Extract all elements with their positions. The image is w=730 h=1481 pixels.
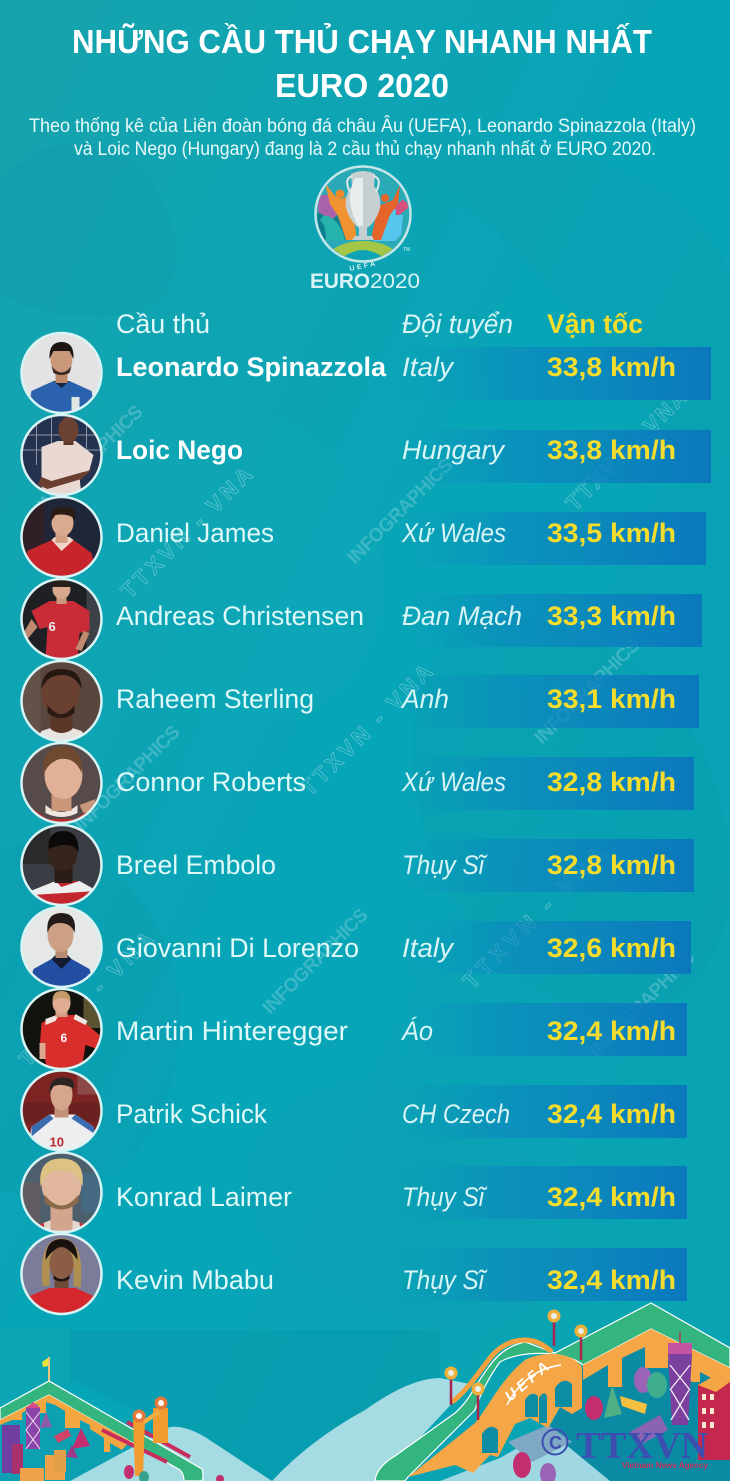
watermarks: TTXVN - VNA (296, 659, 437, 801)
portrait: Konrad Laimer (20, 1152, 102, 1234)
row: Loic Nego: 33,8 km/h (547, 435, 676, 465)
orange rim (452, 1340, 552, 1402)
portrait: Raheem Sterling (20, 660, 102, 742)
UEFA arch: UEFA (502, 1359, 552, 1405)
portrait: Leonardo Spinazzola (20, 332, 102, 414)
portrait: Breel Embolo (20, 824, 102, 906)
row: Kevin Mbabu: Kevin Mbabu (116, 1265, 274, 1295)
tower block (26, 1402, 40, 1449)
row: Patrik Schick: CH Czech (402, 1099, 510, 1129)
row: Kevin Mbabu: Thụy Sĩ (402, 1265, 488, 1295)
row: Giovanni Di Lorenzo: Italy (402, 933, 455, 963)
row: Leonardo Spinazzola: 33,8 km/h (547, 352, 676, 382)
portrait: Loic Nego (20, 414, 102, 496)
bridge (102, 1396, 190, 1476)
row: Connor Roberts: Connor Roberts (116, 767, 306, 797)
watermarks: TTXVN - VNA (116, 462, 257, 604)
illustration: right UEFA arch and city (272, 1303, 730, 1481)
portrait: Martin Hinteregger (20, 988, 102, 1070)
row: Loic Nego (116, 435, 676, 465)
hills right (272, 1378, 470, 1481)
row: Daniel James: 33,5 km/h (547, 518, 676, 548)
speed bars (400, 347, 711, 1301)
flag (42, 1357, 50, 1382)
portrait: Martin Hinteregger: 6 (60, 1031, 68, 1045)
row: Breel Embolo: Breel Embolo (116, 850, 276, 880)
row: Patrik Schick: 32,4 km/h (547, 1099, 676, 1129)
column headers: Vận tốc (547, 309, 643, 339)
watermarks: TTXVN - VNA (561, 385, 692, 516)
portrait: Andreas Christensen: 6 (48, 619, 56, 634)
trees (40, 1412, 224, 1481)
column headers: Đội tuyển (402, 309, 513, 339)
watermarks: INFOGRAPHICS (259, 905, 373, 1019)
portrait: Giovanni Di Lorenzo (20, 906, 102, 988)
row: Connor Roberts: 32,8 km/h (547, 767, 676, 797)
TTXVN copyright logo: C (549, 1433, 562, 1453)
logo: UEFA Euro 2020: 2020 (370, 270, 420, 293)
row: Connor Roberts: Xứ Wales (401, 767, 506, 797)
row: Giovanni Di Lorenzo: Giovanni Di Lorenzo (116, 933, 359, 963)
row: Breel Embolo (116, 850, 676, 880)
intro text: Theo thống kê của Liên đoàn bóng đá châu Âu (UEFA), Leonardo Spinazzola (Italy) (29, 115, 696, 137)
green road (0, 1381, 203, 1481)
logo: UEFA Euro 2020: EURO (310, 270, 370, 293)
city ground (0, 1395, 135, 1481)
row: Loic Nego: Hungary (402, 435, 505, 465)
watermarks (14, 385, 700, 1072)
watermarks: TTXVN - VNA (458, 841, 610, 994)
row: Martin Hinteregger: Áo (400, 1016, 433, 1046)
title: EURO 2020 (275, 67, 449, 104)
row: Andreas Christensen (116, 601, 676, 631)
watermarks: TTXVN - VNA (14, 927, 159, 1072)
row: Breel Embolo: Thụy Sĩ (402, 850, 488, 880)
row: Martin Hinteregger: Martin Hinteregger (116, 1016, 348, 1046)
bridge arches right (583, 1329, 730, 1388)
arches (0, 1395, 130, 1452)
tower (668, 1332, 692, 1425)
title (72, 23, 652, 104)
logo: UEFA Euro 2020: UEFA (349, 261, 376, 273)
logo: UEFA Euro 2020 (310, 166, 420, 293)
row: Konrad Laimer: Thụy Sĩ (402, 1182, 488, 1212)
row: Konrad Laimer: Konrad Laimer (116, 1182, 292, 1212)
hills left (70, 1427, 272, 1481)
row: Giovanni Di Lorenzo: 32,6 km/h (547, 933, 676, 963)
TTXVN copyright logo: Vietnam News Agency (622, 1461, 709, 1470)
row: Daniel James: Daniel James (116, 518, 274, 548)
row: Raheem Sterling: 33,1 km/h (547, 684, 676, 714)
illustration: left city and bridge (0, 1357, 272, 1481)
watermarks: INFOGRAPHICS (531, 635, 645, 749)
portrait: Daniel James (20, 496, 102, 578)
row: Raheem Sterling: Anh (400, 684, 449, 714)
row: Kevin Mbabu: 32,4 km/h (547, 1265, 676, 1295)
watermarks: INFOGRAPHICS (586, 948, 700, 1062)
row: Martin Hinteregger (116, 1016, 676, 1046)
portrait: Andreas Christensen (20, 578, 102, 660)
row: Connor Roberts (116, 767, 676, 797)
column headers (116, 309, 643, 339)
row: Leonardo Spinazzola (116, 352, 676, 382)
intro text (29, 115, 696, 160)
buildings (2, 1425, 66, 1481)
red building (698, 1375, 730, 1460)
row: Giovanni Di Lorenzo (116, 933, 676, 963)
row: Patrik Schick: Patrik Schick (116, 1099, 267, 1129)
lamps (444, 1310, 588, 1420)
row: Breel Embolo: 32,8 km/h (547, 850, 676, 880)
logo: UEFA Euro 2020: TM (403, 247, 410, 253)
pale path under arch (440, 1430, 610, 1481)
portrait: Patrik Schick: 10 (50, 1134, 64, 1150)
portrait: Patrik Schick (20, 1070, 102, 1152)
portrait: Kevin Mbabu (20, 1233, 102, 1315)
portrait: Connor Roberts (20, 742, 102, 824)
row: Raheem Sterling (116, 684, 676, 714)
row: Leonardo Spinazzola: Leonardo Spinazzola (116, 352, 387, 382)
city ground (548, 1329, 730, 1481)
watermarks: INFOGRAPHICS (71, 722, 185, 836)
green road (375, 1303, 730, 1481)
TTXVN copyright logo: TTXVN (576, 1425, 708, 1467)
row: Kevin Mbabu (116, 1265, 676, 1295)
row: Daniel James (116, 518, 676, 548)
UEFA arch (408, 1354, 582, 1477)
watermarks: INFOGRAPHICS (344, 455, 458, 569)
row: Andreas Christensen: 33,3 km/h (547, 601, 676, 631)
column headers: Cầu thủ (116, 309, 210, 339)
row: Konrad Laimer: 32,4 km/h (547, 1182, 676, 1212)
row: Konrad Laimer (116, 1182, 676, 1212)
row: Patrik Schick (116, 1099, 676, 1129)
bus (54, 1429, 71, 1443)
intro text: và Loic Nego (Hungary) đang là 2 cầu thủ chạy nhanh nhất ở EURO 2020. (74, 139, 656, 160)
row: Andreas Christensen: Đan Mạch (402, 601, 522, 631)
title: NHỮNG CẦU THỦ CHẠY NHANH NHẤT (72, 23, 652, 60)
watermarks: INFOGRAPHICS (34, 402, 148, 516)
row: Daniel James: Xứ Wales (401, 518, 506, 548)
row: Andreas Christensen: Andreas Christensen (116, 601, 364, 631)
row: Leonardo Spinazzola: Italy (402, 352, 455, 382)
trees and bus (513, 1367, 668, 1481)
row: Martin Hinteregger: 32,4 km/h (547, 1016, 676, 1046)
row: Loic Nego: Loic Nego (116, 435, 243, 465)
row: Raheem Sterling: Raheem Sterling (116, 684, 314, 714)
